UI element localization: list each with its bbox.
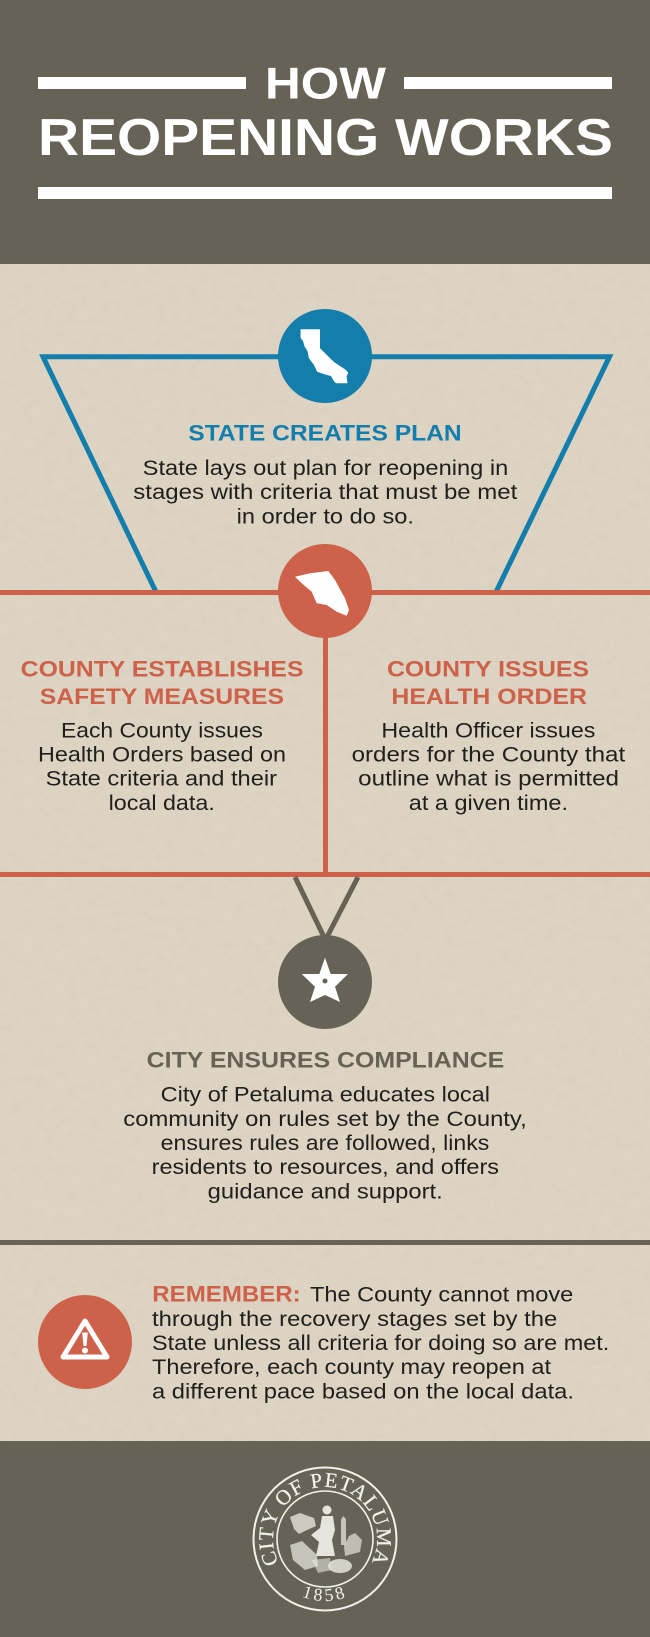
heading: county issues health order: COUNTY ISSUES <box>387 657 589 682</box>
county frame lines <box>0 590 650 877</box>
seal illustration <box>290 1506 362 1573</box>
icon: star <box>278 935 372 1029</box>
heading: county issues health order <box>387 657 589 709</box>
text: health order description: Health Officer issues <box>381 720 595 743</box>
text: state description <box>133 457 517 528</box>
heading: county establishes safety measures <box>21 657 303 709</box>
text: state description: State lays out plan for reopening in <box>143 457 508 480</box>
text: city description: ensures rules are followed, links <box>161 1132 489 1155</box>
text: county safety measures description: Each County issues <box>61 720 263 743</box>
text: city description: guidance and support. <box>208 1180 443 1203</box>
icon: warning <box>38 1295 132 1389</box>
text: state description: stages with criteria that must be met <box>133 481 517 504</box>
icon: Sonoma County <box>278 544 372 638</box>
heading: county establishes safety measures: COUNTY ESTABLISHES <box>21 657 303 682</box>
panel: city <box>123 877 527 1203</box>
panel: county <box>0 544 650 877</box>
text: city description: City of Petaluma educates local <box>161 1084 490 1107</box>
text: state description: in order to do so. <box>237 505 414 528</box>
divider <box>0 1240 650 1245</box>
text: city description: community on rules set by the County, <box>123 1108 527 1131</box>
icon: California <box>278 309 372 403</box>
callout text: Therefore, each county may reopen at <box>152 1356 551 1379</box>
text: county safety measures description <box>38 720 286 815</box>
heading: city: CITY ENSURES COMPLIANCE <box>147 1048 504 1073</box>
heading: county issues health order: HEALTH ORDER <box>391 684 587 709</box>
text: county safety measures description: Health Orders based on <box>38 744 286 767</box>
callout text: a different pace based on the local data. <box>152 1380 574 1403</box>
seal: City of Petaluma: CITY OF PETALUMA <box>258 1472 391 1566</box>
callout text: State unless all criteria for doing so are met. <box>152 1332 609 1355</box>
callout text: through the recovery stages set by the <box>152 1308 557 1331</box>
connector lines <box>295 877 358 937</box>
text: county safety measures description: local data. <box>109 792 215 815</box>
heading: state: STATE CREATES PLAN <box>188 421 462 446</box>
callout text <box>152 1282 609 1403</box>
seal: City of Petaluma: 1858 <box>303 1586 344 1602</box>
title: HOW <box>265 59 387 108</box>
title: REOPENING WORKS <box>38 109 613 167</box>
callout text: The County cannot move <box>310 1284 573 1307</box>
text: county safety measures description: State criteria and their <box>46 768 277 791</box>
text: city description <box>123 1084 527 1203</box>
funnel outline <box>43 357 610 592</box>
text: health order description <box>352 720 625 815</box>
text: health order description: outline what is permitted <box>358 768 619 791</box>
text: health order description: orders for the County that <box>352 744 625 767</box>
text: city description: residents to resources, and offers <box>152 1156 499 1179</box>
title <box>38 59 613 199</box>
heading: county establishes safety measures: SAFETY MEASURES <box>40 684 284 709</box>
paper background <box>0 264 650 1441</box>
panel: footer <box>0 1441 650 1637</box>
text: health order description: at a given time. <box>409 792 568 815</box>
panel: remember callout <box>38 1282 609 1403</box>
callout text: REMEMBER: <box>152 1282 301 1307</box>
seal: City of Petaluma <box>252 1466 398 1612</box>
panel: state creates plan <box>43 309 610 592</box>
panel: header <box>0 0 650 264</box>
